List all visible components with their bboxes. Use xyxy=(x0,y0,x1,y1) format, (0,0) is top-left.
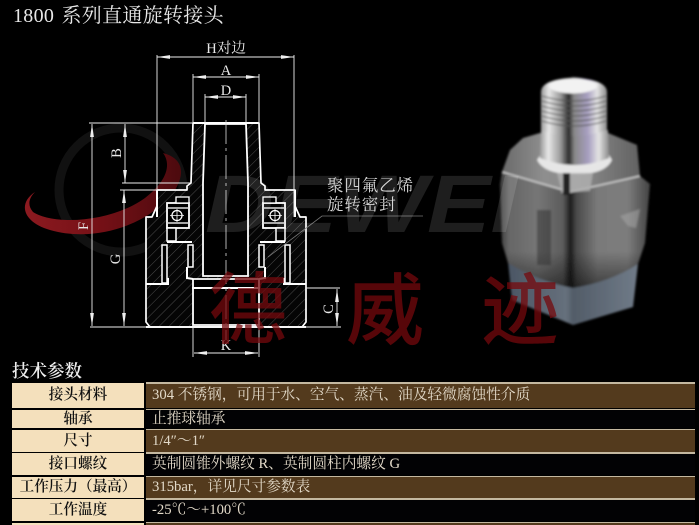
upper hexagon face xyxy=(502,133,640,193)
left bearing xyxy=(167,197,189,228)
section drawing of the swivel joint xyxy=(146,120,423,340)
row: bearing: 轴承 xyxy=(63,411,93,427)
dimension labels: D xyxy=(221,83,231,99)
neck xyxy=(540,130,609,165)
row: bearing: 止推球轴承 xyxy=(152,411,225,427)
thread grooves xyxy=(542,96,606,126)
row: material: 304 不锈钢，可用于水、空气、蒸汽、油及轻微腐蚀性介质 xyxy=(152,387,530,403)
row: temperature: -25℃～+100℃ xyxy=(152,502,246,518)
row: pressure xyxy=(12,477,695,498)
dark stripe on cylinder xyxy=(537,210,551,265)
red watermark characters: 迹 xyxy=(481,267,559,355)
row: size xyxy=(12,430,695,452)
dimension lines xyxy=(89,55,341,357)
right bearing xyxy=(263,197,285,228)
neck reflection on face xyxy=(557,173,593,193)
row: size: 尺寸 xyxy=(63,433,93,449)
internal seal cavities xyxy=(162,228,290,283)
row: thread: 英制圆锥外螺纹 R、英制圆柱内螺纹 G xyxy=(152,456,400,472)
technical drawing and product artwork xyxy=(24,40,651,357)
lower hexagon xyxy=(508,262,638,325)
dimension labels: C xyxy=(321,304,337,314)
dimension labels: H对边 xyxy=(206,40,246,57)
dimension labels xyxy=(76,40,337,354)
row: temperature xyxy=(12,499,246,521)
row: bearing xyxy=(12,410,226,428)
centre line xyxy=(225,120,227,340)
hatched body xyxy=(146,123,306,327)
bore and lower cavity xyxy=(193,124,259,325)
row: material: 接头材料 xyxy=(49,387,107,403)
title: 1800 系列直通旋转接头 xyxy=(13,5,224,27)
watermark glimpse on cylinder xyxy=(620,209,640,228)
watermark ring xyxy=(59,128,183,252)
row: temperature: 工作温度 xyxy=(49,502,107,518)
watermark red swoosh xyxy=(25,153,181,234)
threaded end xyxy=(541,77,607,136)
product photo of the swivel joint xyxy=(500,77,650,325)
neck fillet xyxy=(537,150,612,174)
red watermark characters: 德 xyxy=(209,266,287,354)
dimension labels: B xyxy=(109,148,125,158)
row: pressure: 工作压力（最高） xyxy=(20,479,136,495)
seal pointer mark xyxy=(268,216,423,257)
watermark DEWEI logotype: DEWEI xyxy=(205,159,520,250)
row: pressure: 315bar，详见尺寸参数表 xyxy=(152,479,310,495)
cylinder body xyxy=(500,172,650,288)
row: next row sliver xyxy=(12,523,695,525)
dark reflection stripe xyxy=(563,173,570,195)
row: size: 1/4″～1″ xyxy=(152,433,205,449)
callout: PTFE rotary seal xyxy=(327,175,414,214)
callout: PTFE rotary seal: 旋转密封 xyxy=(327,195,397,214)
red watermark characters xyxy=(209,266,559,355)
row: material xyxy=(12,383,695,408)
shoulder highlight xyxy=(502,172,640,192)
section heading: technical parameters: 技术参数 xyxy=(12,361,82,381)
red watermark characters: 威 xyxy=(346,267,424,355)
callout: PTFE rotary seal: 聚四氟乙烯 xyxy=(327,175,414,195)
row: thread xyxy=(12,453,400,475)
dimension labels: K xyxy=(221,338,232,354)
row: thread: 接口螺纹 xyxy=(49,456,107,472)
dimension labels: A xyxy=(221,63,232,79)
parameter table xyxy=(12,382,695,525)
dimension labels: G xyxy=(108,253,124,264)
dimension labels: F xyxy=(76,222,92,230)
thread opening xyxy=(549,78,597,94)
cylinder lower shading xyxy=(500,184,650,288)
outline details xyxy=(146,123,306,327)
